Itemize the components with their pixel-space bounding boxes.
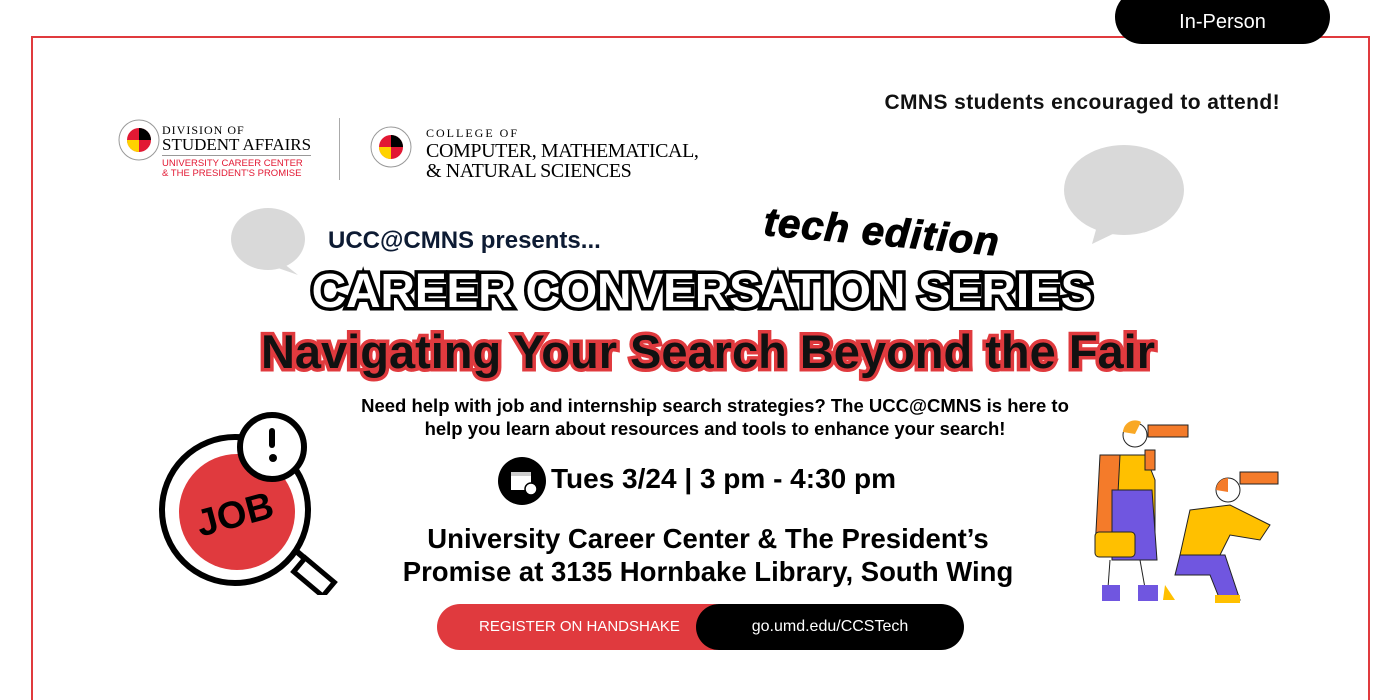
icon: calendar bbox=[498, 457, 546, 505]
presents heading: UCC@CMNS presents... bbox=[328, 227, 601, 254]
speech bubble right bbox=[1064, 145, 1184, 244]
text: division of student affairs bbox=[162, 123, 311, 178]
icon: job magnifier: JOB bbox=[192, 485, 278, 545]
description: Need help with job and internship search strategies? The UCC@CMNS is here to bbox=[361, 395, 1069, 416]
tech edition: tech edition bbox=[762, 200, 1002, 265]
button: register bbox=[437, 604, 737, 650]
logos bbox=[118, 118, 698, 182]
subtitle: Navigating Your Search Beyond the Fair bbox=[261, 325, 1155, 378]
text: division of student affairs: STUDENT AFFAIRS bbox=[162, 135, 311, 154]
logo: CMNS seal bbox=[370, 126, 412, 168]
location: University Career Center & The President’s bbox=[427, 523, 989, 554]
text: college of CMNS bbox=[426, 126, 698, 182]
in-person pill bbox=[1115, 0, 1330, 44]
button: link bbox=[696, 604, 964, 650]
register buttons bbox=[437, 604, 964, 650]
date and time bbox=[498, 457, 896, 505]
location: Promise at 3135 Hornbake Library, South Wing bbox=[403, 556, 1013, 587]
location bbox=[403, 523, 1013, 587]
illustration: women with telescopes bbox=[1094, 420, 1278, 603]
text: division of student affairs: DIVISION OF bbox=[162, 123, 245, 137]
button: link: go.umd.edu/CCSTech bbox=[752, 618, 908, 635]
text: college of CMNS: COLLEGE OF bbox=[426, 126, 519, 140]
description: help you learn about resources and tools to enhance your search! bbox=[425, 418, 1005, 439]
CMNS encouragement text: CMNS students encouraged to attend! bbox=[884, 91, 1280, 114]
text: division of student affairs: UNIVERSITY CAREER CENTER bbox=[162, 158, 303, 169]
icon: job magnifier bbox=[159, 412, 338, 595]
description bbox=[361, 395, 1069, 439]
button: register: REGISTER ON HANDSHAKE bbox=[479, 618, 680, 635]
main title: CAREER CONVERSATION SERIES bbox=[312, 265, 1092, 318]
date and time: Tues 3/24 | 3 pm - 4:30 pm bbox=[551, 463, 896, 494]
text: college of CMNS: & NATURAL SCIENCES bbox=[426, 160, 631, 182]
text: division of student affairs: & THE PRESIDENT'S PROMISE bbox=[162, 168, 301, 178]
speech bubble left bbox=[231, 208, 305, 275]
text: college of CMNS: COMPUTER, MATHEMATICAL, bbox=[426, 140, 698, 162]
logo: student affairs seal bbox=[118, 120, 160, 160]
in-person pill: In-Person bbox=[1179, 11, 1266, 33]
